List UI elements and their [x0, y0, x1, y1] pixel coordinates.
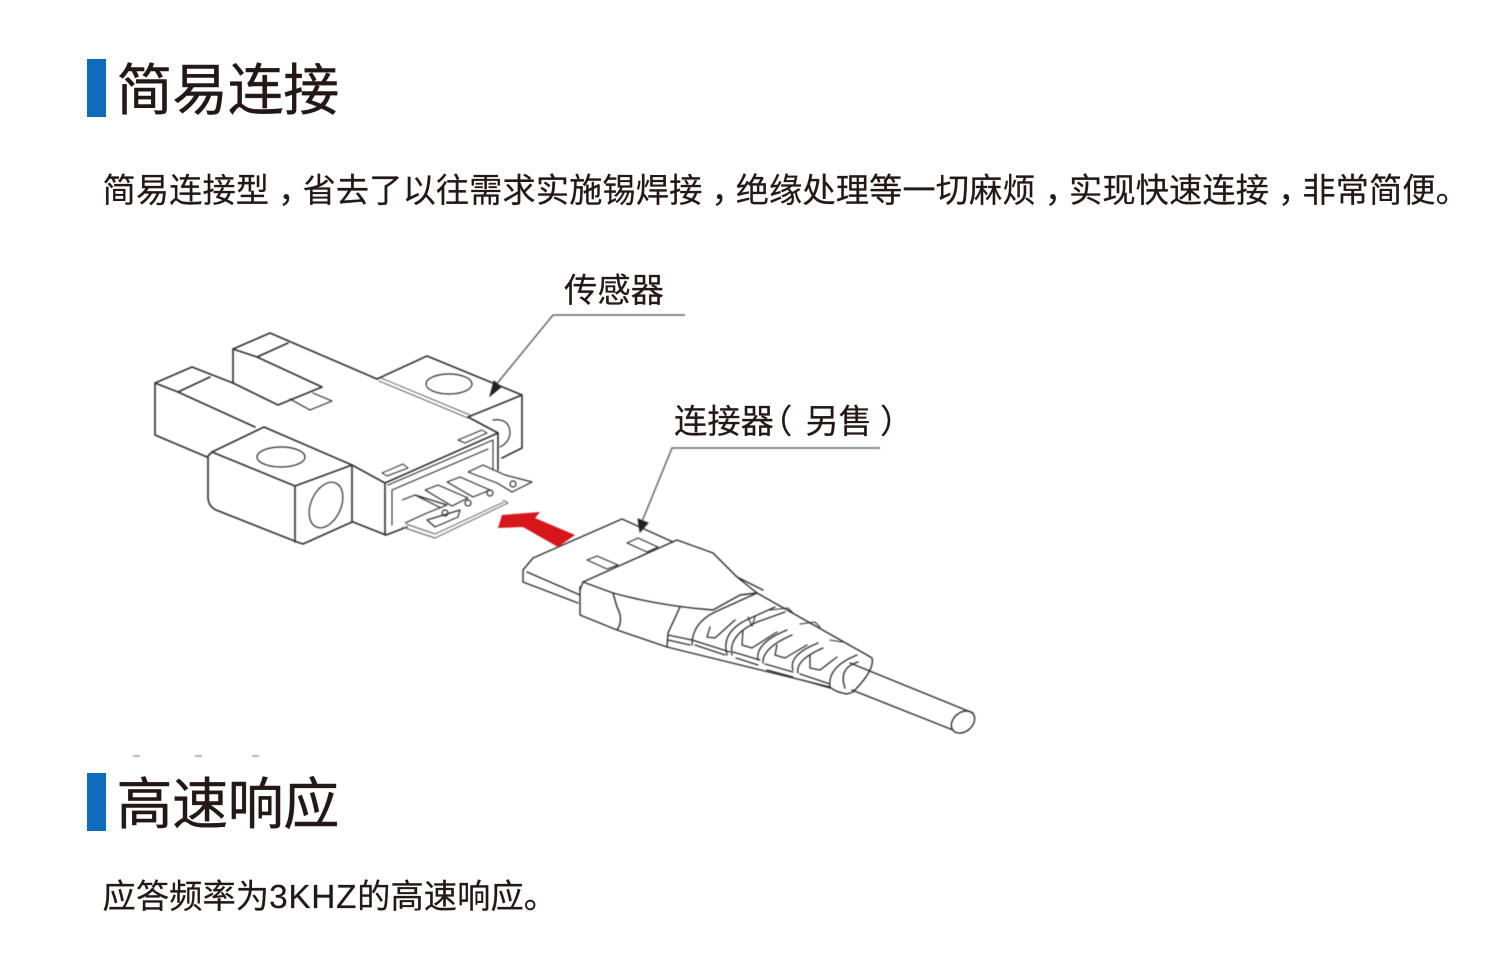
- icon: sensor body: [155, 333, 522, 544]
- text block: simple connection description: 简易连接型 ，省去了以往需求实施锡焊接 ，绝缘处理等一切麻烦 ，实现快速连接 ，非常简便。: [102, 163, 1469, 212]
- icon: sensor terminals: [402, 465, 532, 538]
- text block: high speed response description: 应答频率为3KHZ的高速响应。: [102, 869, 557, 918]
- decorative remnants: small marks above second heading: [133, 755, 259, 757]
- arrow: sensor leader line: [490, 315, 685, 396]
- label: sensor: 传感器: [564, 263, 664, 312]
- section marker: blue bar: [87, 773, 106, 831]
- arrow: insertion direction: [498, 512, 575, 547]
- icon: connector plug: [523, 519, 979, 738]
- arrow: connector leader line: [638, 448, 880, 532]
- label: connector sold separately: 连接器（ 另售）: [674, 394, 913, 443]
- heading: high speed response: 高速响应: [116, 760, 339, 841]
- section marker: blue bar: [87, 59, 106, 117]
- heading: simple connection: 简易连接: [116, 46, 339, 127]
